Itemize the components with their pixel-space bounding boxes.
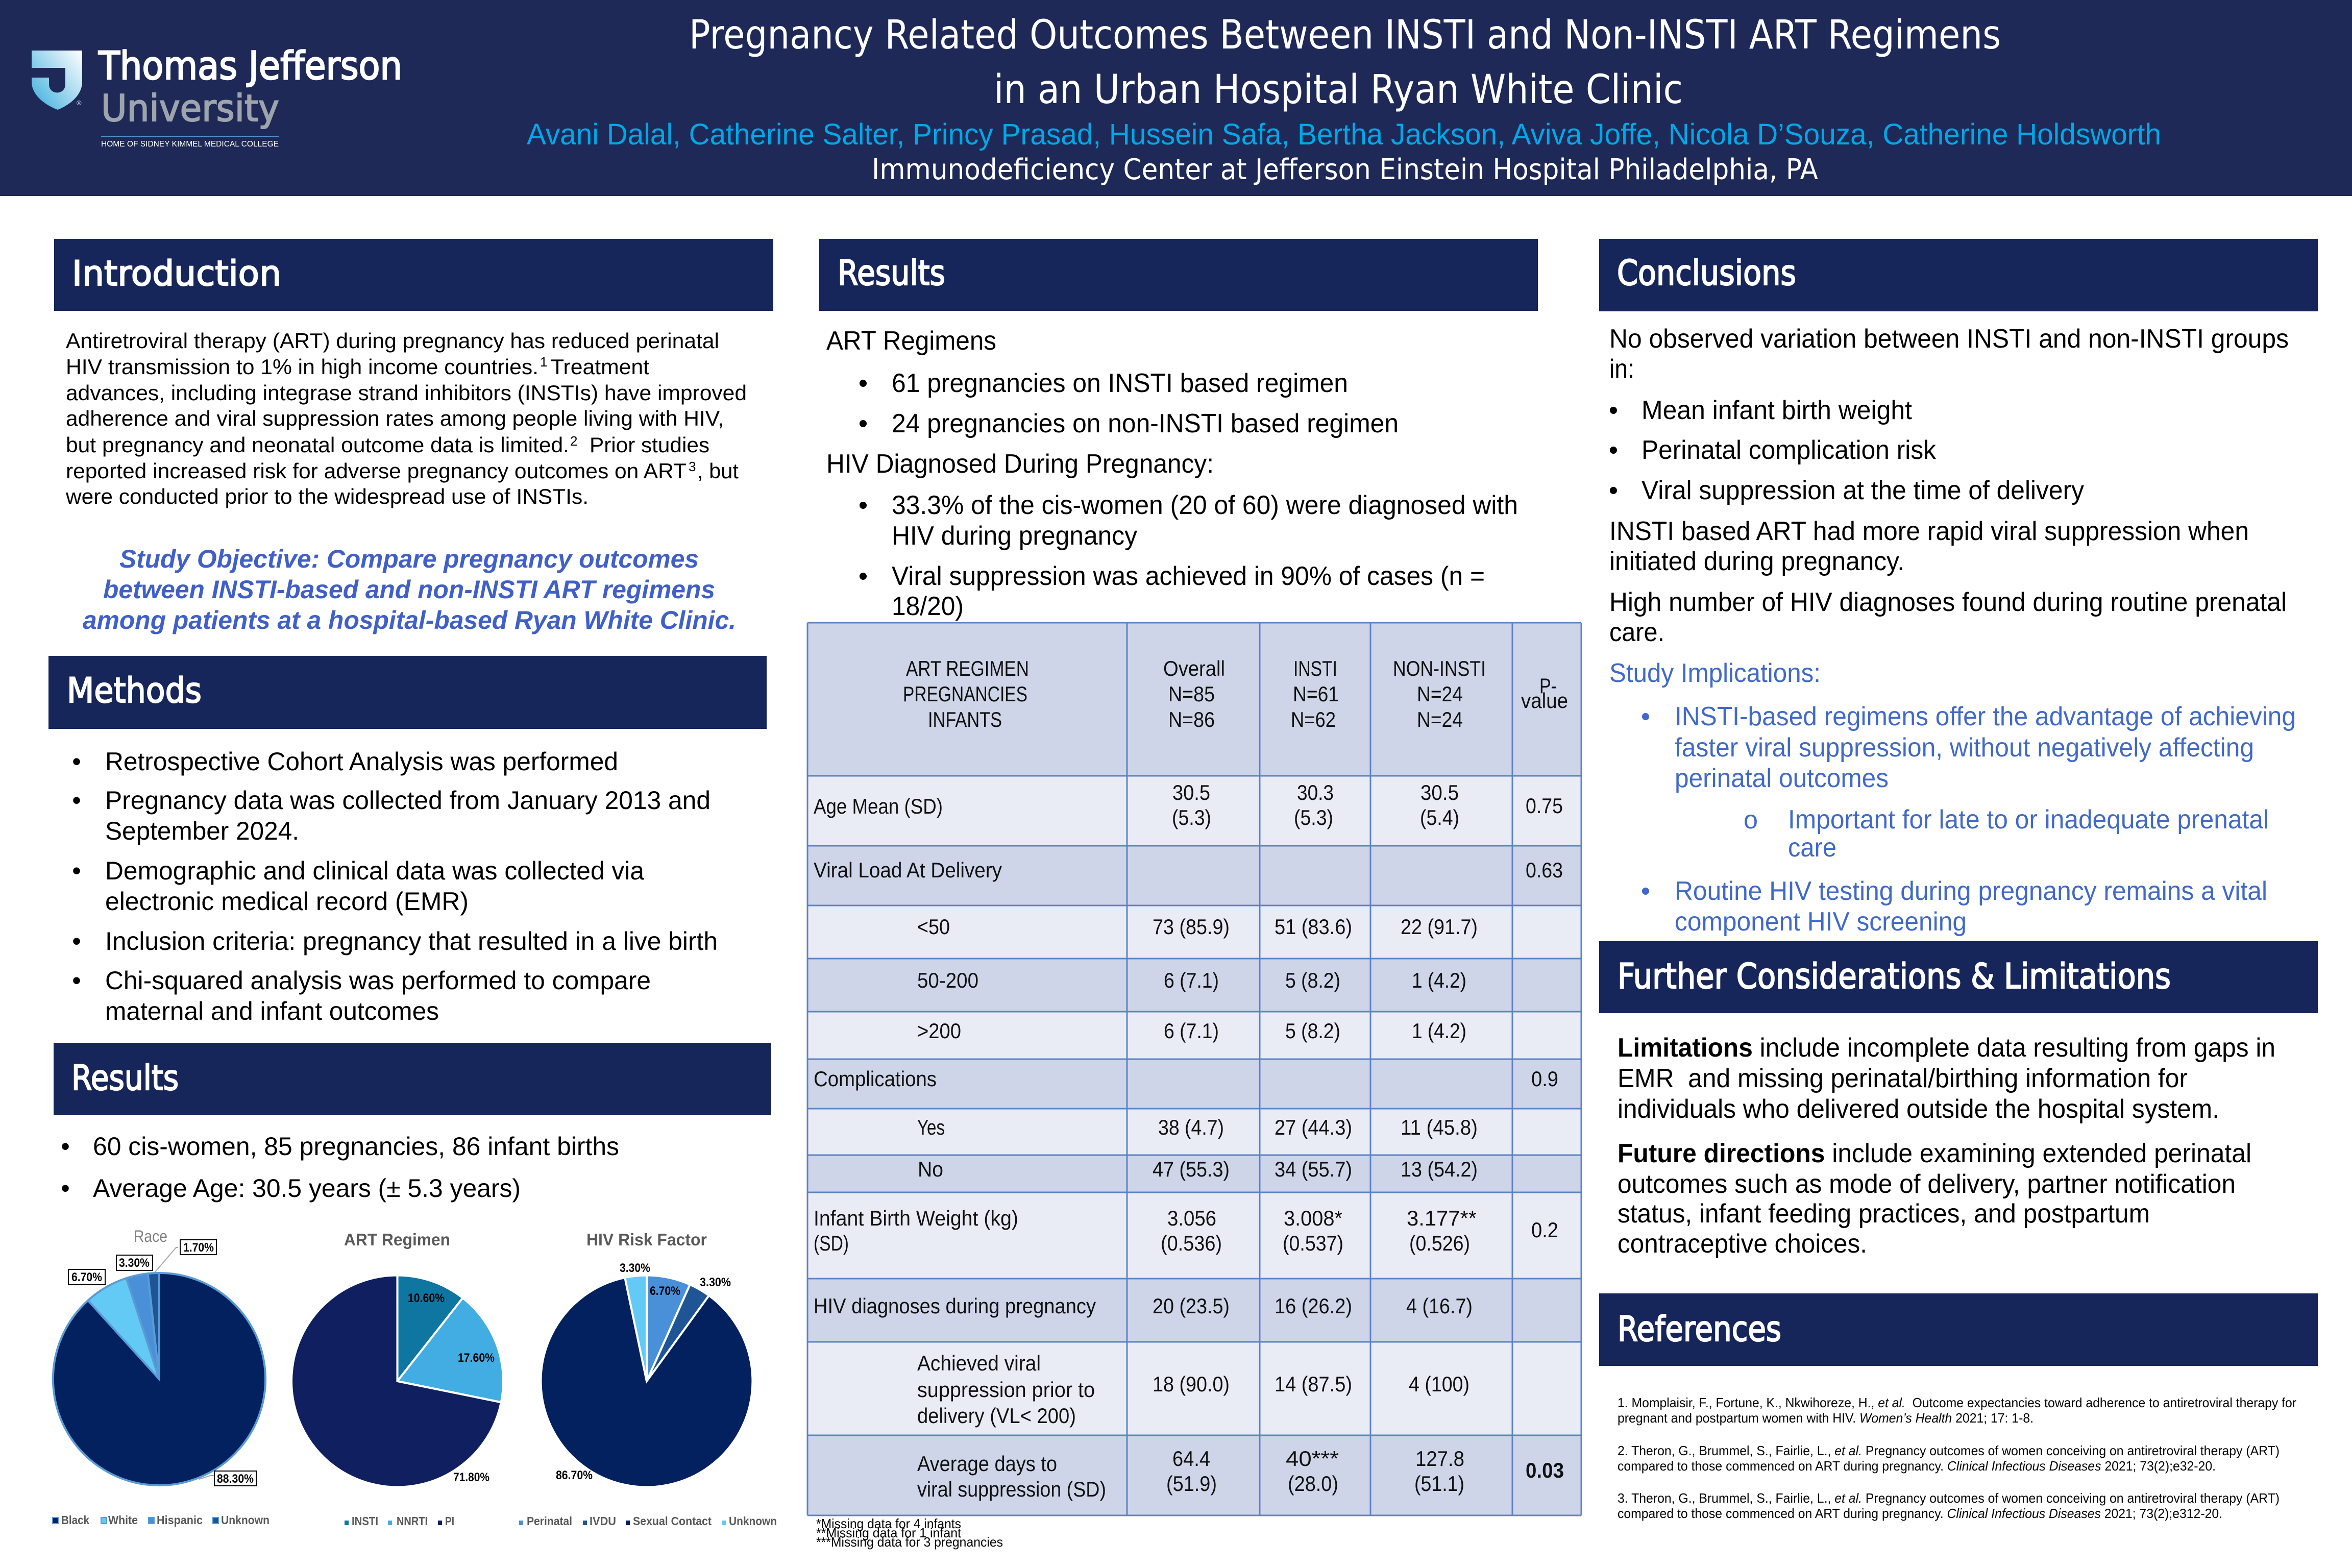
text block: methods bullets: September 2024.	[105, 817, 299, 845]
text block: ART regimens: 61 pregnancies on INSTI based regimen	[892, 369, 1348, 398]
legend: HIV risk factor: Perinatal	[527, 1514, 572, 1528]
text block: reference list: compared to those commenced on ART during pregnancy. Clinical Infectious Diseases 2021; 73(2);e312-20.	[1618, 1506, 2222, 1521]
row: HIV diagnoses during pregnancy: 20 (23.5)	[1153, 1294, 1230, 1318]
row: average days to viral suppression: 0.03	[1526, 1458, 1564, 1482]
table: outcomes by ART regimen	[807, 623, 1581, 1515]
text block: conclusions: Mean infant birth weight	[1641, 396, 1913, 425]
pie chart: race	[53, 1227, 270, 1527]
row: infant birth weight: (0.537)	[1283, 1231, 1343, 1255]
pie chart: HIV risk factor: 3.30%	[620, 1261, 650, 1275]
pie chart: ART regimen: 71.80%	[453, 1471, 489, 1484]
pie chart: race: Race	[134, 1227, 167, 1245]
row: viral load at delivery: 6 (7.1)	[1164, 1019, 1219, 1043]
text block: conclusions: •	[1609, 396, 1618, 425]
text block: limitations: EMR and missing perinatal/birthing information for	[1618, 1064, 2188, 1093]
row: infant birth weight: (0.536)	[1161, 1231, 1222, 1255]
row: infant birth weight: 3.056	[1167, 1206, 1216, 1230]
row: infant birth weight	[814, 1206, 1558, 1255]
text block: future directions: outcomes such as mode of delivery, partner notification	[1618, 1169, 2236, 1199]
text block: HIV diagnosed during pregnancy: HIV during pregnancy	[892, 521, 1137, 551]
text block: study implications: faster viral suppression, without negatively affecting	[1675, 733, 2254, 763]
row: achieved viral suppression: suppression prior to	[917, 1378, 1095, 1402]
text block: methods bullets: Chi-squared analysis was performed to compare	[105, 966, 651, 995]
text block: conclusions: •	[1609, 435, 1618, 465]
heading: Introduction: Introduction	[72, 254, 281, 294]
text block: HIV diagnosed during pregnancy: Viral suppression was achieved in 90% of cases (n =	[892, 561, 1485, 591]
row: complications	[814, 1067, 1558, 1181]
table header row: INSTI	[1293, 656, 1337, 680]
text block: conclusions: care.	[1609, 618, 1664, 647]
text block: ART regimens: ART Regimens	[826, 326, 996, 356]
legend: race	[53, 1513, 270, 1527]
legend: race: Black	[61, 1513, 89, 1527]
heading: Further Considerations & Limitations	[1599, 941, 2318, 1013]
row: complications: 47 (55.3)	[1153, 1157, 1230, 1181]
table header row: N=24	[1417, 707, 1463, 731]
table header row: N=85	[1168, 682, 1215, 706]
text block: methods bullets: •	[72, 786, 81, 815]
table footnotes	[816, 1516, 1003, 1550]
legend: race: Hispanic	[157, 1513, 203, 1527]
row: viral load at delivery: 1 (4.2)	[1412, 968, 1466, 992]
row: viral load at delivery: 6 (7.1)	[1164, 968, 1219, 992]
text block: methods bullets: •	[72, 966, 81, 995]
pie chart: HIV risk factor: HIV Risk Factor	[586, 1230, 707, 1249]
row: complications: 11 (45.8)	[1401, 1115, 1478, 1139]
table header row: ART REGIMEN	[906, 656, 1029, 680]
text block: future directions: contraceptive choices.	[1618, 1229, 1867, 1259]
row: age: (5.3)	[1294, 805, 1333, 829]
logo: Thomas Jefferson University: ®	[77, 99, 82, 107]
row: HIV diagnoses during pregnancy	[814, 1294, 1473, 1318]
text block: methods bullets: electronic medical record (EMR)	[105, 887, 469, 916]
legend: ART regimen: NNRTI	[397, 1514, 428, 1528]
row: average days to viral suppression: (28.0)	[1288, 1472, 1338, 1496]
legend: ART regimen	[345, 1514, 454, 1528]
text block: HIV diagnosed during pregnancy: 33.3% of the cis-women (20 of 60) were diagnosed with	[892, 491, 1518, 520]
text block: HIV diagnosed during pregnancy: 18/20)	[892, 592, 964, 621]
row: viral load at delivery: 51 (83.6)	[1275, 915, 1352, 939]
table header row: P-	[1539, 674, 1557, 698]
table header row: PREGNANCIES	[903, 682, 1027, 706]
row: average days to viral suppression: viral suppression (SD)	[917, 1477, 1106, 1501]
text block: introduction body: 1	[540, 354, 547, 370]
row: average days to viral suppression: 64.4	[1172, 1447, 1210, 1471]
row: achieved viral suppression: delivery (VL< 200)	[917, 1404, 1076, 1428]
table header row: N=62	[1291, 707, 1336, 731]
pie chart: HIV risk factor: 6.70%	[650, 1284, 680, 1298]
title: in an Urban Hospital Ryan White Clinic	[994, 67, 1683, 113]
row: achieved viral suppression: 18 (90.0)	[1153, 1372, 1230, 1396]
row: age: (5.3)	[1172, 805, 1211, 829]
pie chart: race: 1.70%	[183, 1241, 214, 1255]
text block: reference list	[1618, 1395, 2296, 1521]
text block: introduction body: , but	[697, 459, 739, 483]
callout: study objective: Study Objective: Compare pregnancy outcomes	[119, 545, 699, 573]
text block: cohort summary: 60 cis-women, 85 pregnancies, 86 infant births	[93, 1132, 619, 1161]
row: achieved viral suppression: Achieved viral	[917, 1351, 1041, 1375]
row: viral load at delivery: 5 (8.2)	[1285, 968, 1340, 992]
table header row: N=24	[1417, 682, 1463, 706]
row: viral load at delivery: 5 (8.2)	[1285, 1019, 1340, 1043]
row: achieved viral suppression: 14 (87.5)	[1275, 1372, 1352, 1396]
legend: race: Unknown	[221, 1513, 270, 1527]
heading: Results	[819, 239, 1538, 311]
text block: study implications: Routine HIV testing during pregnancy remains a vital	[1675, 876, 2267, 906]
row: viral load at delivery: >200	[917, 1019, 961, 1043]
heading: Methods	[48, 656, 767, 729]
affiliation: Immunodeficiency Center at Jefferson Einstein Hospital Philadelphia, PA	[872, 153, 1818, 186]
pie chart: HIV risk factor: 86.70%	[556, 1468, 593, 1482]
row: complications: 27 (44.3)	[1275, 1115, 1352, 1139]
panel: results left	[53, 1043, 777, 1528]
text block: methods bullets: •	[72, 747, 81, 776]
row: age: 30.3	[1297, 780, 1334, 804]
text block: cohort summary: Average Age: 30.5 years (± 5.3 years)	[93, 1174, 521, 1203]
text block: introduction body: Antiretroviral therapy (ART) during pregnancy has reduced perinatal	[66, 329, 719, 353]
heading: Methods: Methods	[67, 671, 202, 711]
row: complications: 34 (55.7)	[1275, 1157, 1352, 1181]
text block: introduction body: Treatment	[551, 355, 649, 379]
panel: methods	[48, 656, 767, 1025]
icon: J shield	[32, 51, 82, 110]
table footnotes: **Missing data for 1 infant	[816, 1525, 962, 1540]
text block: conclusions: INSTI based ART had more rapid viral suppression when	[1609, 517, 2249, 546]
heading: Results: Results	[71, 1058, 179, 1098]
row: age: 30.5	[1420, 780, 1459, 804]
heading: References	[1599, 1293, 2318, 1366]
pie chart: race: 3.30%	[119, 1256, 150, 1270]
table header row	[903, 656, 1568, 731]
text block: conclusions: Viral suppression at the time of delivery	[1641, 476, 2084, 505]
legend: ART regimen: INSTI	[352, 1514, 378, 1528]
row: achieved viral suppression	[917, 1351, 1469, 1428]
panel: further considerations and limitations	[1599, 941, 2318, 1259]
text block: limitations: Limitations include incomplete data resulting from gaps in	[1618, 1033, 2275, 1063]
text block: introduction body: 3	[689, 459, 696, 474]
text block: introduction body: 2	[570, 433, 577, 449]
text block: study implications: perinatal outcomes	[1675, 764, 1889, 793]
text block: study implications: component HIV screening	[1675, 907, 1967, 937]
text block: introduction body: adherence and viral suppression rates among people living with HIV,	[66, 406, 724, 430]
text block: methods bullets: Retrospective Cohort Analysis was performed	[105, 747, 618, 776]
text block: methods bullets: •	[72, 927, 81, 955]
pie chart: ART regimen: 17.60%	[458, 1351, 495, 1365]
logo: Thomas Jefferson University	[32, 43, 402, 149]
panel: references	[1599, 1293, 2318, 1521]
text block: reference list: 2. Theron, G., Brummel, S., Fairlie, L., et al. Pregnancy outcomes of women conceiving on antiretroviral therapy (ART)	[1618, 1443, 2280, 1458]
legend: HIV risk factor: Sexual Contact	[633, 1514, 712, 1528]
row: infant birth weight: (0.526)	[1409, 1231, 1470, 1255]
row: infant birth weight: 3.008*	[1284, 1206, 1342, 1230]
table footnotes: *Missing data for 4 infants	[816, 1516, 961, 1531]
row: age: 30.5	[1172, 780, 1210, 804]
row: average days to viral suppression	[917, 1447, 1564, 1501]
text block: methods bullets: Pregnancy data was collected from January 2013 and	[105, 786, 710, 815]
row: HIV diagnoses during pregnancy: 16 (26.2)	[1275, 1294, 1352, 1318]
table header row: INFANTS	[928, 707, 1002, 731]
table header row: NON-INSTI	[1393, 656, 1486, 680]
text block: reference list: 1. Momplaisir, F., Fortune, K., Nkwihoreze, H., et al. Outcome expectancies toward adherence to antiretroviral therapy for	[1618, 1395, 2296, 1410]
text block: methods bullets: maternal and infant outcomes	[105, 997, 439, 1025]
row: complications: 38 (4.7)	[1158, 1115, 1224, 1139]
row: HIV diagnoses during pregnancy: 4 (16.7)	[1406, 1294, 1473, 1318]
text block: study implications: •	[1641, 876, 1650, 906]
authors: Avani Dalal, Catherine Salter, Princy Prasad, Hussein Safa, Bertha Jackson, Aviva Joffe, Nicola D’Souza, Catherine Holdsworth	[527, 118, 2161, 151]
text block: cohort summary	[61, 1132, 619, 1203]
row: infant birth weight: 0.2	[1531, 1218, 1558, 1242]
text block: introduction body	[65, 329, 747, 508]
logo: Thomas Jefferson University: University	[101, 87, 279, 130]
text block: reference list: pregnant and postpartum women with HIV. Women’s Health 2021; 17: 1-8.	[1618, 1410, 2033, 1426]
row: viral load at delivery: 1 (4.2)	[1412, 1019, 1466, 1043]
callout: study objective	[83, 545, 736, 634]
text block: ART regimens: •	[859, 369, 868, 398]
row: achieved viral suppression: 4 (100)	[1409, 1372, 1469, 1396]
logo: Thomas Jefferson University: HOME OF SIDNEY KIMMEL MEDICAL COLLEGE	[101, 140, 279, 149]
text block: conclusions: High number of HIV diagnoses found during routine prenatal	[1609, 587, 2287, 617]
text block: methods bullets	[72, 747, 718, 1025]
row: viral load at delivery: Viral Load At Delivery	[814, 858, 1002, 882]
table header row: N=86	[1168, 707, 1215, 731]
heading: Results	[54, 1043, 771, 1115]
legend: HIV risk factor: Unknown	[729, 1514, 777, 1528]
row: average days to viral suppression: 127.8	[1415, 1447, 1464, 1471]
pie chart: race: 88.30%	[217, 1472, 254, 1486]
text block: ART regimens: •	[859, 409, 868, 438]
heading: Conclusions: Conclusions	[1617, 253, 1796, 293]
heading: Results: Results	[838, 253, 945, 293]
text block: study implications: Study Implications:	[1609, 658, 1821, 688]
pie chart: race: 6.70%	[71, 1270, 102, 1284]
row: average days to viral suppression: (51.1)	[1414, 1472, 1464, 1496]
pie chart: ART regimen	[291, 1230, 503, 1528]
text block: introduction body: but pregnancy and neonatal outcome data is limited.	[66, 433, 569, 457]
header banner	[0, 0, 2352, 196]
heading: Conclusions	[1599, 239, 2318, 311]
text block: methods bullets: •	[72, 856, 81, 885]
text block: introduction body: HIV transmission to 1% in high income countries.	[66, 355, 538, 379]
text block: future directions: status, infant feeding practices, and postpartum	[1618, 1199, 2150, 1229]
callout: study objective: between INSTI-based and non-INSTI ART regimens	[103, 575, 715, 604]
logo: Thomas Jefferson University: Thomas Jefferson	[98, 43, 402, 88]
text block: HIV diagnosed during pregnancy: HIV Diagnosed During Pregnancy:	[826, 449, 1214, 479]
text block: introduction body: Prior studies	[590, 433, 709, 457]
row: complications: No	[918, 1157, 943, 1181]
row: age: (5.4)	[1420, 805, 1459, 829]
table header row: Overall	[1163, 656, 1225, 680]
row: age: 0.75	[1526, 794, 1563, 818]
text block: reference list: compared to those commenced on ART during pregnancy. Clinical Infectious Diseases 2021; 73(2);e32-20.	[1618, 1458, 2216, 1474]
text block: study implications: care	[1788, 833, 1836, 863]
text block: HIV diagnosed during pregnancy	[826, 449, 1518, 621]
row: viral load at delivery	[814, 858, 1563, 1043]
pie chart: HIV risk factor	[519, 1230, 777, 1528]
text block: introduction body: advances, including integrase strand inhibitors (INSTIs) have improved	[66, 381, 747, 405]
table header row: N=61	[1293, 682, 1339, 706]
text block: study implications: o	[1744, 805, 1758, 834]
legend: race: White	[108, 1513, 138, 1527]
text block: conclusions: in:	[1609, 354, 1634, 384]
text block: methods bullets: Demographic and clinical data was collected via	[105, 856, 644, 885]
pie chart: ART regimen: 10.60%	[408, 1291, 445, 1305]
text block: reference list: 3. Theron, G., Brummel, S., Fairlie, L., et al. Pregnancy outcomes of women conceiving on antiretroviral therapy (ART)	[1618, 1490, 2280, 1506]
row: complications: 13 (54.2)	[1401, 1157, 1478, 1181]
text block: study implications: •	[1641, 702, 1650, 731]
text block: future directions: Future directions include examining extended perinatal	[1618, 1139, 2251, 1168]
heading: Introduction	[54, 239, 773, 311]
text block: conclusions	[1609, 324, 2289, 647]
row: age: Age Mean (SD)	[814, 794, 943, 818]
text block: conclusions: initiated during pregnancy.	[1609, 547, 1904, 576]
text block: cohort summary: •	[61, 1174, 70, 1203]
table footnotes: ***Missing data for 3 pregnancies	[816, 1534, 1003, 1550]
pie chart: ART regimen: ART Regimen	[344, 1230, 450, 1249]
row: viral load at delivery: 50-200	[917, 968, 978, 992]
row: viral load at delivery: 0.63	[1526, 858, 1563, 882]
text block: conclusions: Perinatal complication risk	[1641, 435, 1937, 465]
text block: HIV diagnosed during pregnancy: •	[859, 491, 868, 520]
text block: cohort summary: •	[61, 1132, 70, 1161]
legend: HIV risk factor: IVDU	[590, 1514, 616, 1528]
text block: future directions	[1618, 1139, 2251, 1259]
title: Pregnancy Related Outcomes Between INSTI and Non-INSTI ART Regimens	[689, 12, 2001, 58]
text block: ART regimens	[826, 326, 1399, 438]
row: complications: Yes	[917, 1115, 945, 1139]
title	[689, 12, 2001, 113]
text block: introduction body: were conducted prior to the widespread use of INSTIs.	[65, 484, 589, 508]
row: infant birth weight: Infant Birth Weight (kg)	[814, 1206, 1018, 1230]
heading: References: References	[1618, 1309, 1781, 1350]
row: infant birth weight: 3.177**	[1407, 1206, 1477, 1230]
row: viral load at delivery: <50	[917, 915, 950, 939]
panel: conclusions	[1599, 239, 2318, 937]
row: average days to viral suppression: Average days to	[917, 1452, 1057, 1476]
text block: conclusions: •	[1609, 476, 1618, 505]
text block: HIV diagnosed during pregnancy: •	[859, 561, 868, 591]
row: infant birth weight: (SD)	[814, 1231, 849, 1255]
text block: methods bullets: Inclusion criteria: pregnancy that resulted in a live birth	[105, 927, 718, 955]
row: average days to viral suppression: 40***	[1286, 1447, 1339, 1471]
row: HIV diagnoses during pregnancy: HIV diagnoses during pregnancy	[814, 1294, 1096, 1318]
pie chart: HIV risk factor: 3.30%	[700, 1276, 731, 1289]
row: average days to viral suppression: (51.9)	[1166, 1472, 1217, 1496]
row: viral load at delivery: 73 (85.9)	[1153, 915, 1230, 939]
legend: HIV risk factor	[519, 1514, 777, 1528]
text block: introduction body: reported increased risk for adverse pregnancy outcomes on ART	[66, 459, 687, 483]
row: complications: Complications	[814, 1067, 937, 1091]
row: age	[814, 780, 1563, 829]
text block: study implications	[1609, 658, 2296, 937]
text block: limitations: individuals who delivered outside the hospital system.	[1618, 1094, 2219, 1124]
heading: Further Considerations & Limitations: Further Considerations & Limitations	[1618, 957, 2171, 997]
row: viral load at delivery: 22 (91.7)	[1401, 915, 1478, 939]
panel: results middle	[807, 239, 1581, 1550]
callout: study objective: among patients at a hospital-based Ryan White Clinic.	[83, 606, 736, 634]
legend: ART regimen: PI	[445, 1514, 454, 1528]
row: complications: 0.9	[1531, 1067, 1558, 1091]
text block: limitations	[1618, 1033, 2275, 1124]
text block: conclusions: No observed variation between INSTI and non-INSTI groups	[1609, 324, 2289, 354]
panel: introduction	[54, 239, 773, 634]
text block: study implications: Important for late to or inadequate prenatal	[1788, 805, 2269, 835]
table header row: value	[1521, 689, 1568, 713]
text block: study implications: INSTI-based regimens offer the advantage of achieving	[1675, 702, 2296, 731]
text block: ART regimens: 24 pregnancies on non-INSTI based regimen	[892, 409, 1399, 438]
